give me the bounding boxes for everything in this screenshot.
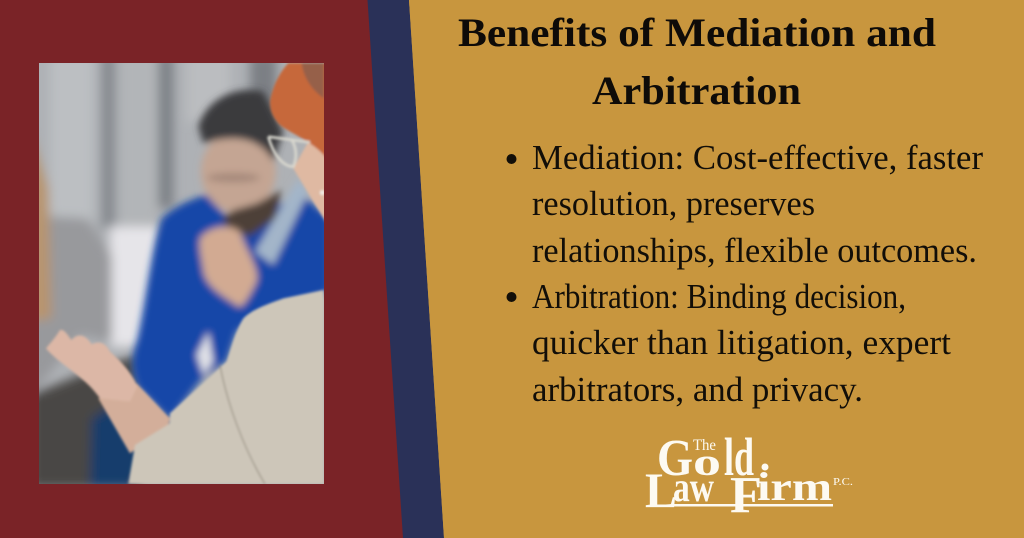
photo: mediation meeting xyxy=(30,55,330,488)
bullet: mediation xyxy=(506,138,983,270)
logo: The Gold Law Firm P.C.: The xyxy=(693,437,716,454)
bullet: arbitration: arbitrators, and privacy. xyxy=(532,370,863,409)
bullet: arbitration: Arbitration: Binding decision, xyxy=(532,277,906,316)
title xyxy=(458,10,936,113)
logo: The Gold Law Firm P.C.: aw xyxy=(673,465,715,511)
bullet: arbitration: quicker than litigation, expert xyxy=(532,323,951,362)
title: Benefits of Mediation and xyxy=(458,10,936,55)
bullet: arbitration xyxy=(506,277,951,409)
bullet: mediation: resolution, preserves xyxy=(532,184,815,223)
logo: The Gold Law Firm P.C.: F xyxy=(730,467,762,524)
logo: The Gold Law Firm P.C. xyxy=(645,427,853,524)
logo: The Gold Law Firm P.C.: G xyxy=(657,430,693,487)
logo: The Gold Law Firm P.C.: L xyxy=(645,462,677,518)
logo: The Gold Law Firm P.C.: o xyxy=(693,441,721,484)
woman in foreground xyxy=(46,63,327,484)
title: Arbitration xyxy=(592,68,801,113)
panel: gold background xyxy=(409,0,1024,538)
bullet list xyxy=(506,138,983,409)
panel: navy diagonal band xyxy=(368,0,444,538)
logo: The Gold Law Firm P.C.: P.C. xyxy=(833,476,853,488)
logo: The Gold Law Firm P.C.: irm xyxy=(757,464,832,509)
logo: The Gold Law Firm P.C.: ld xyxy=(724,427,754,487)
bullet: mediation: Mediation: Cost-effective, faster xyxy=(532,138,983,177)
man in blue sweater xyxy=(132,90,330,420)
panel: maroon background xyxy=(0,0,404,538)
bullet: mediation: relationships, flexible outcomes. xyxy=(532,231,977,270)
